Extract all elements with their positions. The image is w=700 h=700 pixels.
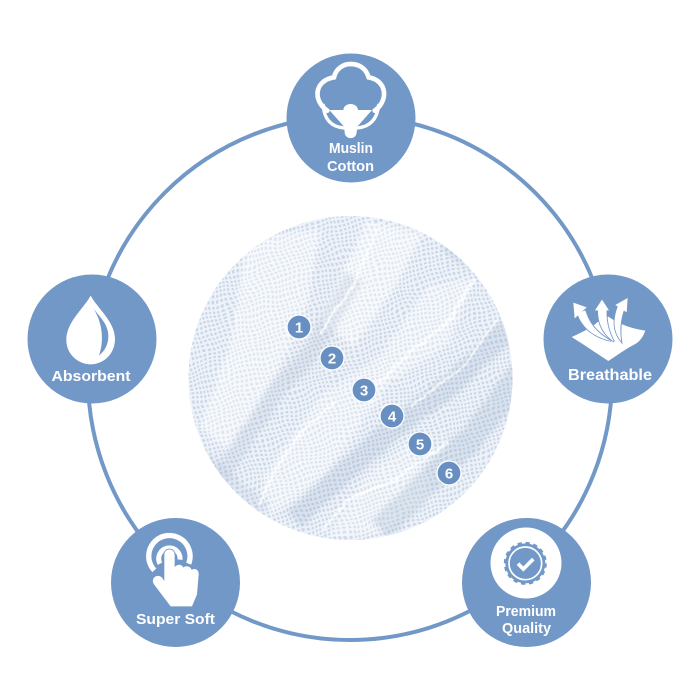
panel: premium quality: Quality xyxy=(502,620,552,637)
badge 6: 6 xyxy=(445,466,453,482)
panel: breathable xyxy=(544,274,672,404)
label: Super Soft xyxy=(136,611,215,628)
label: Premium xyxy=(496,603,556,620)
panel: absorbent xyxy=(28,274,156,404)
badge 1 xyxy=(287,315,311,339)
panel: muslin cotton: Cotton xyxy=(327,158,374,175)
icon: quality seal xyxy=(490,528,562,598)
panel: super soft xyxy=(111,518,240,647)
badge 1: 1 xyxy=(295,320,303,336)
panel: premium quality xyxy=(462,518,591,647)
badge 4: 4 xyxy=(388,408,397,426)
label: Breathable xyxy=(568,367,652,384)
outer ring xyxy=(88,116,612,640)
number badges xyxy=(287,315,461,485)
badge 2 xyxy=(320,346,344,370)
label: Absorbent xyxy=(52,368,131,385)
badge 3: 3 xyxy=(360,382,368,400)
icon: water drop xyxy=(66,296,115,364)
label: Muslin xyxy=(329,140,373,157)
icon: cotton boll xyxy=(317,64,384,138)
badge 5 xyxy=(408,432,432,456)
badge 2: 2 xyxy=(328,350,336,368)
badge 6 xyxy=(437,461,461,485)
badge 4 xyxy=(380,404,404,428)
panel: muslin fabric photo xyxy=(170,200,533,560)
panel: muslin cotton xyxy=(286,54,416,182)
icon: breathable pad with arrows xyxy=(572,298,645,361)
icon: touching hand xyxy=(149,536,199,606)
badge 5: 5 xyxy=(416,436,424,454)
badge 3 xyxy=(352,378,376,402)
